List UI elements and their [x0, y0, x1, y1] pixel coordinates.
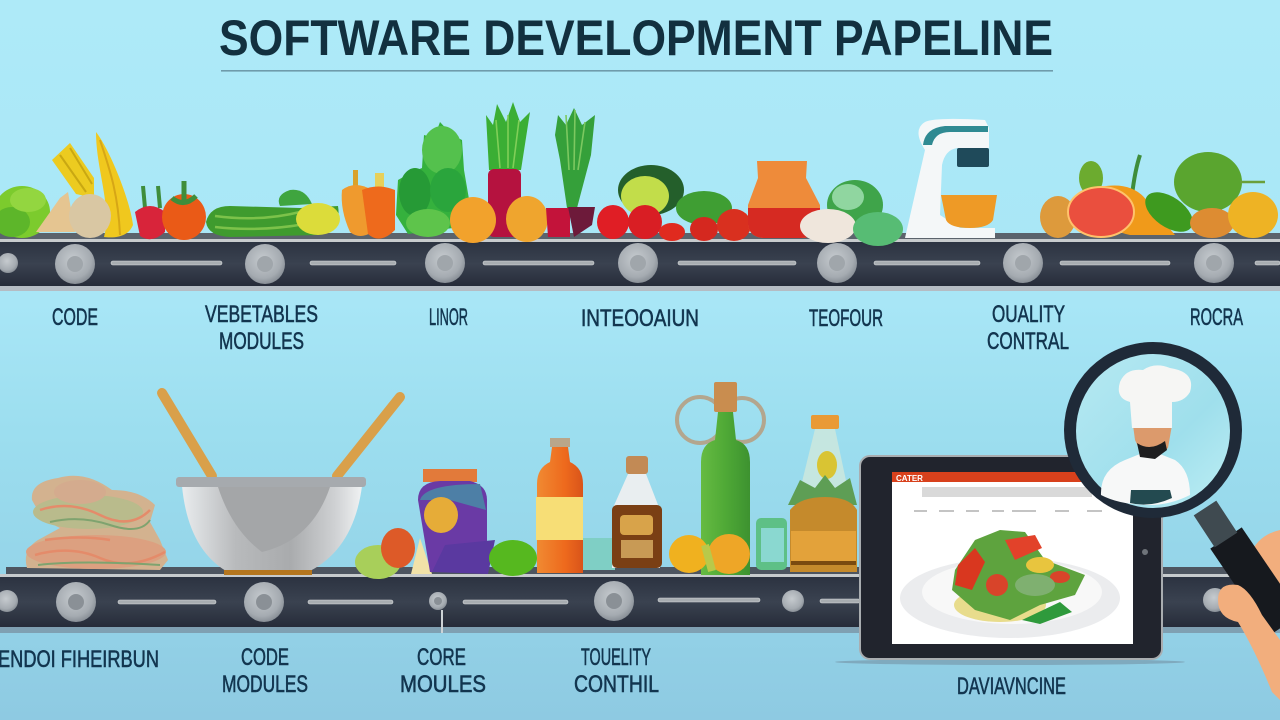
top row labels: INTEOOAIUN: [581, 305, 699, 332]
top row labels: VEBETABLES: [205, 301, 318, 328]
bottom row labels: CODE: [241, 644, 289, 671]
noodle pile: [26, 476, 168, 570]
top row labels: CODE: [52, 304, 98, 331]
vegetables: spring onions: [546, 108, 595, 237]
bottom row labels: MOULES: [400, 671, 486, 698]
vegetables: bananas and root: [36, 132, 133, 238]
top row labels: MODULES: [219, 328, 304, 355]
tablet: [860, 456, 1162, 659]
top row labels: [52, 301, 1243, 355]
vegetables: green leaves: [396, 122, 470, 237]
bottom row labels: ENDOI FIHEIRBUN: [0, 646, 159, 673]
bottom row labels: MODULES: [222, 671, 308, 698]
bottom row labels: [0, 644, 1066, 700]
fruit group: [1040, 152, 1278, 240]
green bottle with loops: [677, 382, 764, 575]
vegetables: broccoli and tomatoes: [597, 165, 751, 241]
stand mixer: [905, 119, 997, 238]
top row labels: TEOFOUR: [809, 305, 883, 332]
bottom conveyor belt: [0, 567, 1280, 633]
herb oil bottle: [788, 415, 857, 572]
produce and purple jar: [355, 469, 537, 579]
orange jar: [748, 161, 820, 238]
lemons: [669, 534, 750, 574]
vegetables: lettuce: [0, 186, 50, 238]
top row labels: LINOR: [429, 304, 468, 331]
garlic and cabbage: [800, 180, 903, 246]
bottom row labels: TOUELITY: [581, 644, 651, 671]
green jar: [756, 518, 787, 570]
bottom row labels: DAVIAVNCINE: [957, 673, 1066, 700]
title: SOFTWARE DEVELOPMENT PAPELINE: [219, 10, 1053, 66]
top row labels: ROCRA: [1190, 304, 1243, 331]
magnifying glass, hand and chef: [1064, 342, 1280, 700]
vegetables: oranges and beet: [450, 102, 548, 243]
plate with salad: [900, 530, 1120, 638]
bottom row labels: CONTHIL: [574, 671, 659, 698]
teal box: [583, 538, 615, 570]
mixing bowl with spoons: [162, 393, 400, 575]
hot sauce bottle: [536, 438, 583, 573]
vegetables: orange peppers: [342, 170, 395, 239]
bottom row labels: CORE: [417, 644, 466, 671]
vegetables: cucumber: [206, 190, 340, 237]
top row labels: OUALITY: [992, 301, 1065, 328]
chef: [1101, 365, 1191, 505]
tablet: CATER: [896, 474, 923, 483]
top row labels: CONTRAL: [987, 328, 1069, 355]
vegetables: red pepper and tomato: [135, 181, 206, 240]
small sauce bottle: [612, 456, 662, 568]
tablet shadow: [835, 659, 1185, 665]
top conveyor belt: [0, 233, 1280, 291]
